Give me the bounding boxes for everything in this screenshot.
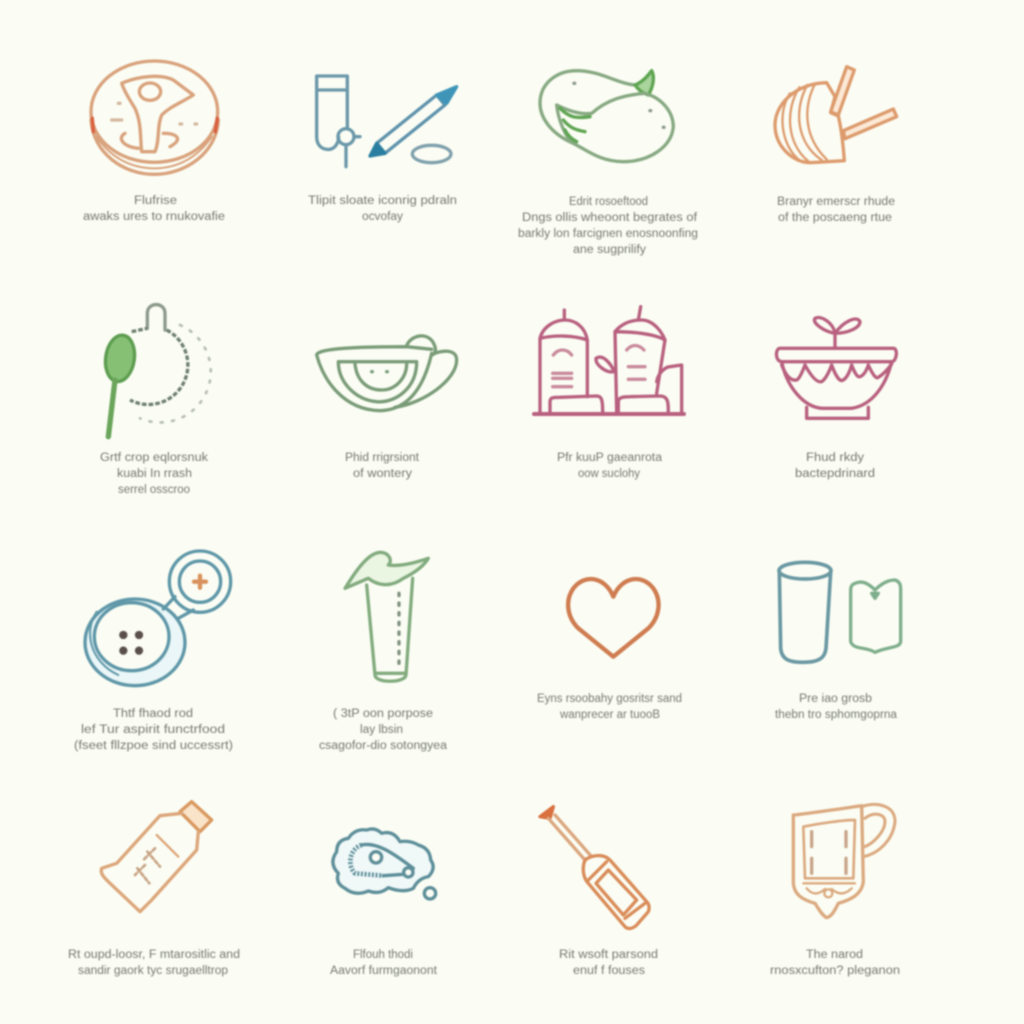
caption: serrel osscroo [118,484,190,496]
caption [319,708,448,752]
caption [308,195,457,223]
caption [537,693,682,721]
caption: csagofor-dio sotongyea [319,740,448,752]
caption: Aavorf furmgaonont [330,965,438,977]
panel: row 3 column 2 [319,552,448,752]
caption: lef Tur aspirit functrfood [81,724,225,736]
caption: Rt oupd-loosr, F mtarositlic and [68,949,240,961]
panel: row 3 column 1 [74,551,233,752]
caption [795,452,875,480]
caption: of wontery [353,468,412,480]
caption: ( 3tP oon porpose [333,708,433,720]
icon: glass and green card [779,562,901,662]
icon: green eggplant [540,71,673,162]
caption [518,196,698,256]
caption: Flufrise [134,195,177,207]
icon: green bowl with handle [317,336,457,411]
caption: thebn tro sphomgoprna [775,709,898,721]
caption [345,452,420,480]
panel: row 4 column 1 [68,802,240,977]
icon: blue pan with ring [85,551,231,686]
caption: enuf f fouses [573,965,645,977]
caption: ane sugprilify [573,244,646,256]
icon: orange sliced bowl with sticks [775,67,897,163]
panel: row 1 column 4 [775,67,897,224]
caption: Pfr kuuP gaeanrota [557,452,663,464]
icon: tube and pen [317,76,457,167]
panel: row 3 column 4 [775,562,901,721]
caption: awaks ures to rnukovafie [83,211,225,223]
caption: kuabi In rrash [117,468,192,480]
panel: row 4 column 2 [330,829,438,977]
caption: Pre iao grosb [799,693,872,705]
icon: pink sprout bowl [776,318,896,418]
icon: orange disc [91,61,218,174]
caption: Phid rrigrsiont [345,452,420,464]
caption: bactepdrinard [795,468,875,480]
icon: orange screwdriver [540,807,649,928]
caption: oow suclohy [578,468,640,480]
caption [100,452,208,496]
icon: orange bottle [101,802,212,912]
caption: Dngs ollis wheoont begrates of [522,212,698,224]
panel: row 4 column 4 [770,805,900,977]
panel: row 1 column 3 [518,71,698,256]
panel: row 2 column 1 [100,305,211,496]
panel: row 2 column 2 [317,336,457,480]
panel: row 2 column 4 [776,318,896,480]
icon: green glass with leaf [345,552,428,681]
icon: leaf spoon and dotted dial [103,305,211,437]
panel: row 4 column 3 [540,807,658,977]
panel: row 1 column 2 [308,76,457,223]
caption: Eyns rsoobahy gosritsr sand [537,693,682,705]
caption: ocvofay [362,211,403,223]
caption: rnosxcufton? pleganon [770,965,900,977]
icon: pink bottles [534,307,684,414]
caption [330,949,438,977]
caption [559,949,658,977]
caption [557,452,663,480]
caption: (fseet fllzpoe sind uccessrt) [74,740,233,752]
caption [74,708,233,752]
caption [775,693,898,721]
caption: wanprecer ar tuooB [559,709,660,721]
caption: Fhud rkdy [806,452,864,464]
caption: barkly lon farcignen enosnoonfing [518,228,698,240]
caption: Branyr emerscr rhude [777,196,895,208]
caption: Tlipit sloate iconrig pdraln [308,195,457,207]
icon: orange mug tablet [793,805,895,918]
caption: of the poscaeng rtue [778,212,892,224]
icon: orange heart [568,579,659,657]
caption: Edrit rosoeftood [569,196,648,208]
caption: Flfouh thodi [353,949,413,961]
caption: Thtf fhaod rod [113,708,193,720]
caption [777,196,895,224]
caption [83,195,225,223]
caption: lay lbsin [360,724,403,736]
panel: row 1 column 1 [83,61,225,223]
caption: sandir gaork tyc srugaelltrop [78,965,228,977]
icon: blue cloud blob [333,829,436,899]
caption: Rit wsoft parsond [559,949,658,961]
caption [770,949,900,977]
caption: Grtf crop eqlorsnuk [100,452,208,464]
panel: row 2 column 3 [534,307,684,480]
caption [68,949,240,977]
caption: The narod [806,949,863,961]
panel: row 3 column 3 [537,579,682,721]
